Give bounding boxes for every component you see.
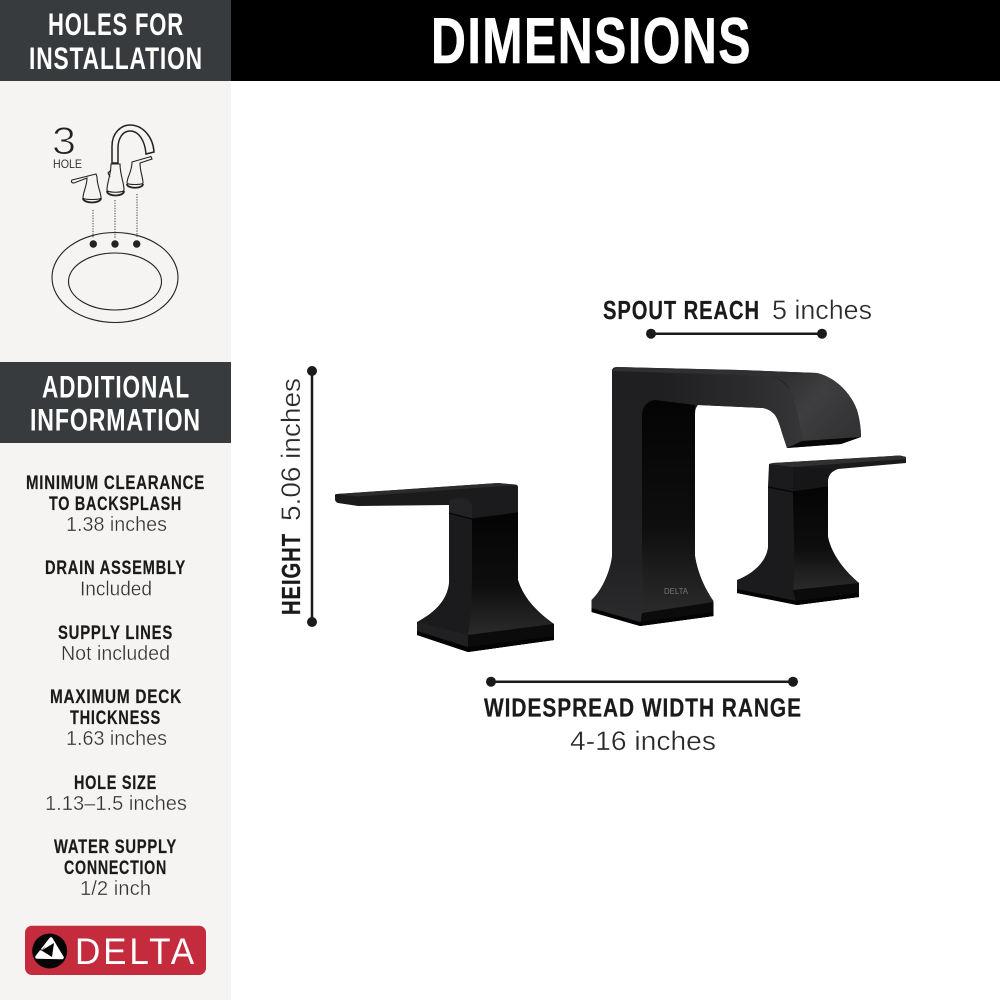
spec: supply lines: Not included [61, 643, 170, 665]
dimension: height: HEIGHT [276, 533, 306, 615]
heading: holes for installation [0, 0, 231, 81]
dimension: spout reach: SPOUT REACH [603, 295, 760, 325]
spec: drain assembly: Included [80, 578, 152, 600]
heading: additional information: ADDITIONAL [42, 368, 190, 404]
icon: 3 hole faucet and sink diagram: 3 [52, 120, 76, 163]
spec: water supply connection: CONNECTION [64, 857, 167, 879]
spec: drain assembly: DRAIN ASSEMBLY [45, 557, 186, 579]
spec: supply lines: SUPPLY LINES [58, 622, 173, 644]
spec: water supply connection: WATER SUPPLY [54, 836, 177, 858]
heading: additional information [0, 362, 231, 443]
spec: maximum deck thickness: THICKNESS [70, 707, 161, 729]
faucet: left handle [335, 483, 554, 652]
logo: delta: DELTA [75, 931, 197, 972]
dimension: widespread width range: 4-16 inches [570, 726, 716, 756]
faucet: right handle [737, 456, 906, 605]
dimension: spout reach [603, 295, 872, 339]
faucet logo text: DELTA [664, 587, 689, 596]
icon: 3 hole faucet and sink diagram [52, 120, 178, 322]
spec: water supply connection [54, 836, 177, 900]
spec: minimum clearance: MINIMUM CLEARANCE [26, 472, 205, 494]
spec: supply lines [58, 622, 173, 665]
spec: minimum clearance: TO BACKSPLASH [49, 493, 182, 515]
faucet: center spout [592, 367, 861, 626]
dimension: spout reach: 5 inches [772, 295, 872, 325]
spec: maximum deck thickness: 1.63 inches [66, 728, 167, 750]
spec: hole size [45, 772, 187, 815]
heading: additional information: INFORMATION [30, 402, 201, 438]
dimension: height: 5.06 inches [276, 378, 306, 521]
spec: maximum deck thickness [50, 686, 182, 750]
dimension: widespread width range [484, 677, 802, 756]
spec: water supply connection: 1/2 inch [80, 878, 151, 900]
title: dimensions [231, 0, 1000, 81]
heading: holes for installation: HOLES FOR [48, 6, 184, 42]
sidebar background [0, 0, 231, 1000]
spec: minimum clearance [26, 472, 205, 536]
title: dimensions: DIMENSIONS [431, 4, 752, 77]
spec: drain assembly [45, 557, 186, 600]
spec: hole size: HOLE SIZE [74, 772, 157, 794]
logo: delta [25, 926, 206, 975]
spec: minimum clearance: 1.38 inches [66, 514, 167, 536]
dimension: widespread width range: WIDESPREAD WIDTH RANGE [484, 693, 802, 723]
dimension: height [276, 366, 317, 627]
spec: hole size: 1.13–1.5 inches [45, 793, 187, 815]
icon: 3 hole faucet and sink diagram: HOLE [53, 157, 82, 171]
heading: holes for installation: INSTALLATION [29, 40, 203, 76]
spec: maximum deck thickness: MAXIMUM DECK [50, 686, 182, 708]
